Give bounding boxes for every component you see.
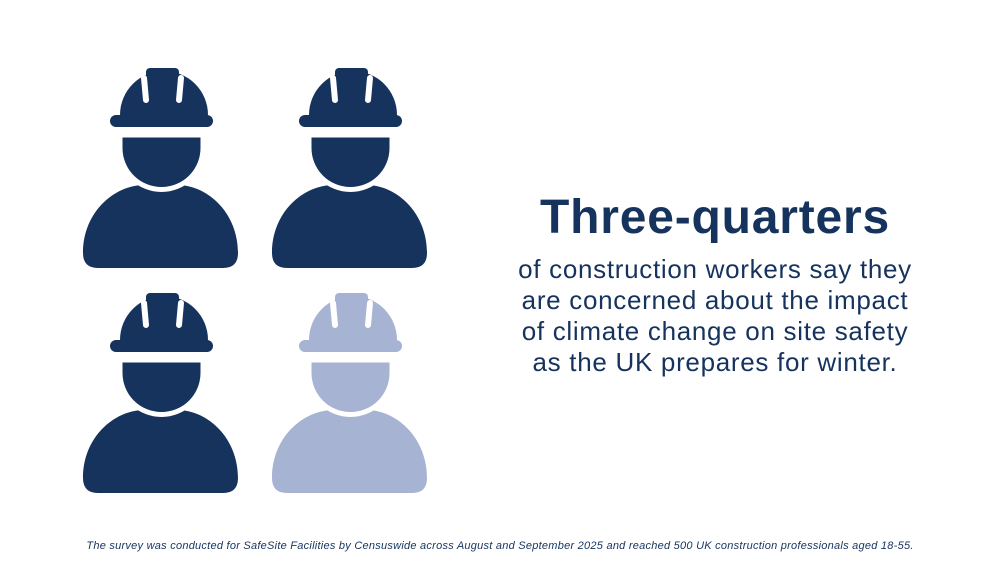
text block: of climate change on site safety bbox=[522, 316, 908, 346]
text block: of construction workers say they bbox=[518, 254, 912, 284]
text block: are concerned about the impact bbox=[522, 285, 908, 315]
icon: worker 1 bbox=[83, 68, 238, 268]
text block bbox=[518, 254, 912, 377]
icon: worker 2 bbox=[272, 68, 427, 268]
heading: Three-quarters bbox=[540, 191, 890, 244]
icon: worker 3 bbox=[83, 293, 238, 493]
icon: worker 4 (light) bbox=[272, 293, 427, 493]
footnote: The survey was conducted for SafeSite Facilities by Censuswide across August and September 2025 and reached 500 UK construction professionals aged 18-55. bbox=[86, 540, 914, 552]
text block: as the UK prepares for winter. bbox=[533, 347, 897, 377]
icons: workers bbox=[82, 68, 427, 493]
